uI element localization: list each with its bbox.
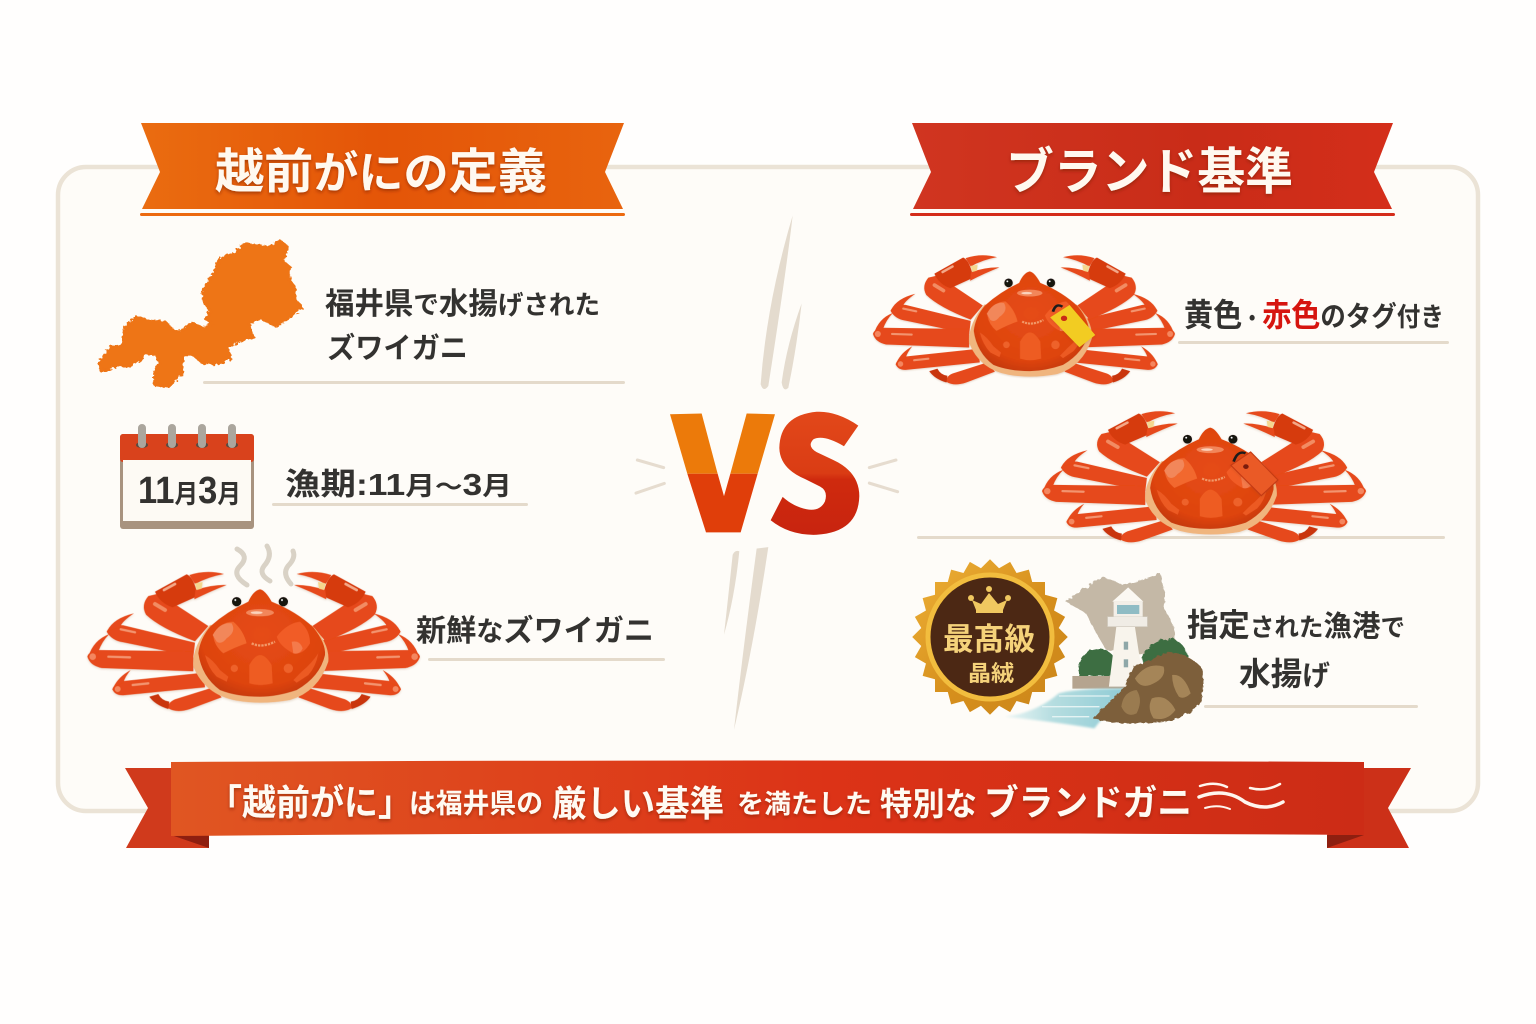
text: designated port: 水揚げ xyxy=(1239,656,1330,692)
heading ribbon: 越前がにの定義: 越前がにの定義 xyxy=(215,146,547,199)
banner text: ブランドガニ xyxy=(984,782,1192,823)
divider: row 2 right xyxy=(917,536,1445,539)
VS spark lines xyxy=(636,460,898,493)
letter S xyxy=(771,412,859,535)
VS slashes xyxy=(724,215,802,730)
illustration: crab with red tag xyxy=(1042,411,1366,542)
banner text: を満たした xyxy=(737,789,872,819)
badge disc xyxy=(928,575,1052,699)
text: designated port xyxy=(1187,607,1405,692)
map: Fukui prefecture xyxy=(99,241,302,387)
banner body xyxy=(171,760,1364,836)
badge: top grade seal: 晶絨 xyxy=(968,661,1014,686)
text: designated port: 指定された漁港で xyxy=(1187,607,1405,643)
banner left tail xyxy=(125,768,209,848)
bottom banner xyxy=(125,760,1411,848)
illustration: crab with yellow tag xyxy=(873,255,1175,384)
text: fishing season: 漁期:11 月～3月 xyxy=(285,467,512,502)
heading ribbon: ブランド基準 xyxy=(910,123,1395,216)
banner text: 厳しい基準 xyxy=(552,783,724,824)
panel: main card xyxy=(58,167,1478,811)
illustration: steamed crab xyxy=(87,572,420,711)
badge: top grade seal: 最髙級 xyxy=(943,622,1035,657)
text: Fukui landing xyxy=(325,288,600,365)
badge: top grade seal xyxy=(912,559,1068,715)
banner text xyxy=(208,782,1192,824)
icon: yellow tag xyxy=(1050,305,1095,347)
divider: row 1 left xyxy=(203,381,625,384)
banner text: は福井県の xyxy=(409,789,543,819)
banner text: 「越前がに」 xyxy=(208,782,412,823)
icon: steam xyxy=(237,546,294,585)
letter V xyxy=(670,414,775,532)
icon: waves xyxy=(1199,784,1283,809)
divider: row 3 right xyxy=(1204,705,1418,708)
text: fresh snow crab: 新鮮なズワイガニ xyxy=(416,614,654,648)
icon: calendar xyxy=(120,428,254,529)
text: Fukui landing: ズワイガニ xyxy=(327,331,468,365)
banner text: 特別な xyxy=(880,786,977,822)
icon: crown xyxy=(968,586,1011,613)
divider: row 2 left xyxy=(272,503,528,506)
heading ribbon: ブランド基準: ブランド基準 xyxy=(1006,144,1293,200)
text: tag colours: 黄色・赤色のタグ付き xyxy=(1184,297,1444,333)
divider: row 3 left xyxy=(428,658,665,661)
banner right tail xyxy=(1327,768,1411,848)
divider: row 1 right xyxy=(1178,341,1449,344)
icon: red tag xyxy=(1231,452,1278,496)
heading ribbon: 越前がにの定義 xyxy=(140,123,625,216)
icon: calendar: 11月3月 xyxy=(138,470,241,512)
VS emblem xyxy=(636,215,898,730)
badge starburst xyxy=(912,559,1068,715)
illustration: lighthouse and harbour xyxy=(1005,573,1204,728)
text: Fukui landing: 福井県で水揚げされた xyxy=(325,288,600,321)
